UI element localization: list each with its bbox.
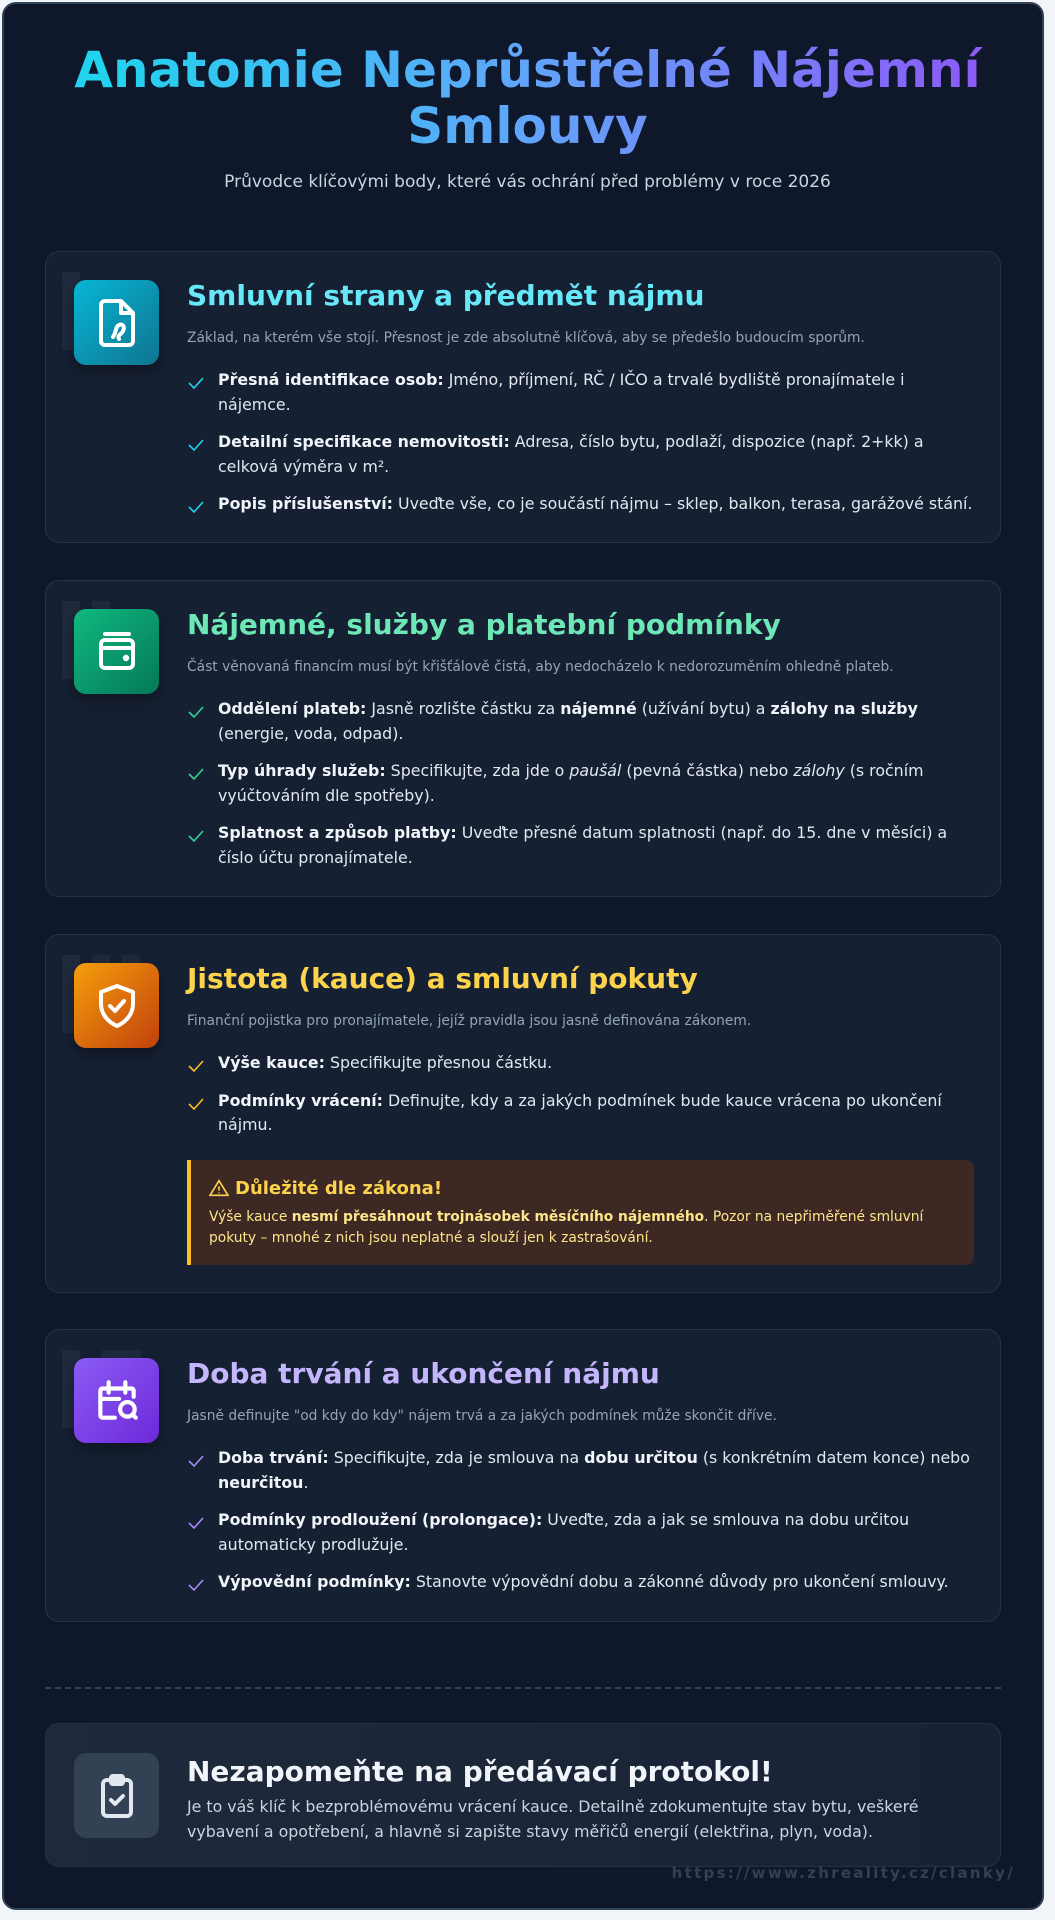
- panel: nájemné a platby: [45, 580, 1001, 897]
- description: Základ, na kterém vše stojí. Přesnost je zde absolutně klíčová, aby se předešlo budoucím sporům.: [187, 330, 865, 346]
- bullet list: Oddělení plateb: Jasně rozlište částku za nájemné (užívání bytu) a zálohy na služby: [218, 699, 918, 718]
- heading: Jistota (kauce) a smluvní pokuty: [187, 962, 698, 995]
- description: Část věnovaná financím musí být křišťálově čistá, aby nedocházelo k nedorozuměním ohledně plateb.: [187, 659, 894, 675]
- footer url: https://www.zhreality.cz/clanky/: [672, 1864, 1015, 1882]
- ghost numeral IV: [62, 1350, 142, 1428]
- bullet list: Detailní specifikace nemovitosti: Adresa, číslo bytu, podlaží, dispozice (např. 2+kk) a celková výměra v m².: [218, 432, 924, 476]
- text block: [185, 962, 974, 1265]
- text block: [187, 279, 972, 513]
- bullet list: [188, 1053, 942, 1134]
- title: [0, 42, 1055, 154]
- bullet list: Typ úhrady služeb: Specifikujte, zda jde o paušál (pevná částka) nebo zálohy (s ročním: [218, 761, 923, 780]
- body text: Je to váš klíč k bezproblémovému vrácení kauce. Detailně zdokumentujte stav bytu, veškeré: [187, 1797, 918, 1816]
- title: Smlouvy: [407, 97, 648, 155]
- bullet list: Přesná identifikace osob: Jméno, příjmení, RČ / IČO a trvalé bydliště pronajímatele i: [218, 370, 905, 389]
- panel: kauce a pokuty: [45, 934, 1001, 1293]
- bullet list: neurčitou.: [218, 1472, 308, 1492]
- text block: [186, 1755, 918, 1841]
- text block: [187, 608, 947, 866]
- callout: legal warning: Výše kauce nesmí přesáhnout trojnásobek měsíčního nájemného. Pozor na nepřiměřené smluvní: [209, 1208, 923, 1224]
- bullet list: Splatnost a způsob platby: Uveďte přesné datum splatnosti (např. do 15. dne v měsíci) a: [218, 823, 947, 842]
- heading: Doba trvání a ukončení nájmu: [187, 1357, 660, 1390]
- bullet list: [188, 1448, 970, 1591]
- bullet list: Doba trvání: Specifikujte, zda je smlouva na dobu určitou (s konkrétním datem konce) nebo: [218, 1448, 970, 1467]
- title: Anatomie Neprůstřelné Nájemní: [74, 41, 981, 99]
- bullet list: [188, 699, 947, 866]
- bullet list: [188, 370, 972, 513]
- bullet list: Podmínky vrácení: Definujte, kdy a za jakých podmínek bude kauce vrácena po ukončení: [218, 1090, 942, 1110]
- panel: doba trvání: [45, 1329, 1001, 1622]
- subtitle: Průvodce klíčovými body, které vás ochrání před problémy v roce 2026: [224, 172, 831, 192]
- heading: Nezapomeňte na předávací protokol!: [187, 1755, 773, 1788]
- body text: vybavení a opotřebení, a hlavně si zapište stavy měřičů energií (elektřina, plyn, voda).: [187, 1822, 873, 1841]
- bullet list: Výpovědní podmínky: Stanovte výpovědní dobu a zákonné důvody pro ukončení smlouvy.: [218, 1572, 949, 1591]
- ghost numeral III: [62, 955, 140, 1033]
- bullet list: (energie, voda, odpad).: [218, 724, 403, 742]
- icon: document: [74, 280, 159, 365]
- heading: Nájemné, služby a platební podmínky: [187, 608, 781, 641]
- bullet list: nájmu.: [218, 1115, 273, 1134]
- panel: předávací protokol: [45, 1723, 1001, 1867]
- heading: Smluvní strany a předmět nájmu: [187, 279, 704, 312]
- bullet list: Výše kauce: Specifikujte přesnou částku.: [218, 1053, 552, 1072]
- bullet list: nájemce.: [218, 394, 291, 414]
- callout: legal warning: Důležité dle zákona!: [235, 1178, 442, 1198]
- bullet list: automaticky prodlužuje.: [218, 1534, 409, 1554]
- icon: clipboard: [74, 1753, 159, 1838]
- ghost numeral I: [62, 272, 80, 350]
- icon: wallet: [74, 609, 159, 694]
- panel: smluvní strany: [45, 251, 1001, 543]
- bullet list: Podmínky prodloužení (prolongace): Uveďte, zda a jak se smlouva na dobu určitou: [218, 1510, 909, 1529]
- ghost numeral II: [62, 601, 110, 679]
- description: Jasně definujte "od kdy do kdy" nájem trvá a za jakých podmínek může skončit dříve.: [187, 1408, 777, 1424]
- icon: shield: [74, 963, 159, 1048]
- description: Finanční pojistka pro pronajímatele, jejíž pravidla jsou jasně definována zákonem.: [187, 1013, 751, 1029]
- body text: [186, 1797, 918, 1841]
- bullet list: vyúčtováním dle spotřeby).: [218, 786, 435, 804]
- callout: legal warning: pokuty – mnohé z nich jsou neplatné a slouží jen k zastrašování.: [209, 1230, 653, 1246]
- text block: [186, 1357, 970, 1591]
- callout: legal warning: [187, 1160, 974, 1264]
- bullet list: číslo účtu pronajímatele.: [218, 848, 413, 866]
- bullet list: Popis příslušenství: Uveďte vše, co je součástí nájmu – sklep, balkon, terasa, garážové stání.: [218, 494, 972, 513]
- icon: calendar: [74, 1358, 159, 1443]
